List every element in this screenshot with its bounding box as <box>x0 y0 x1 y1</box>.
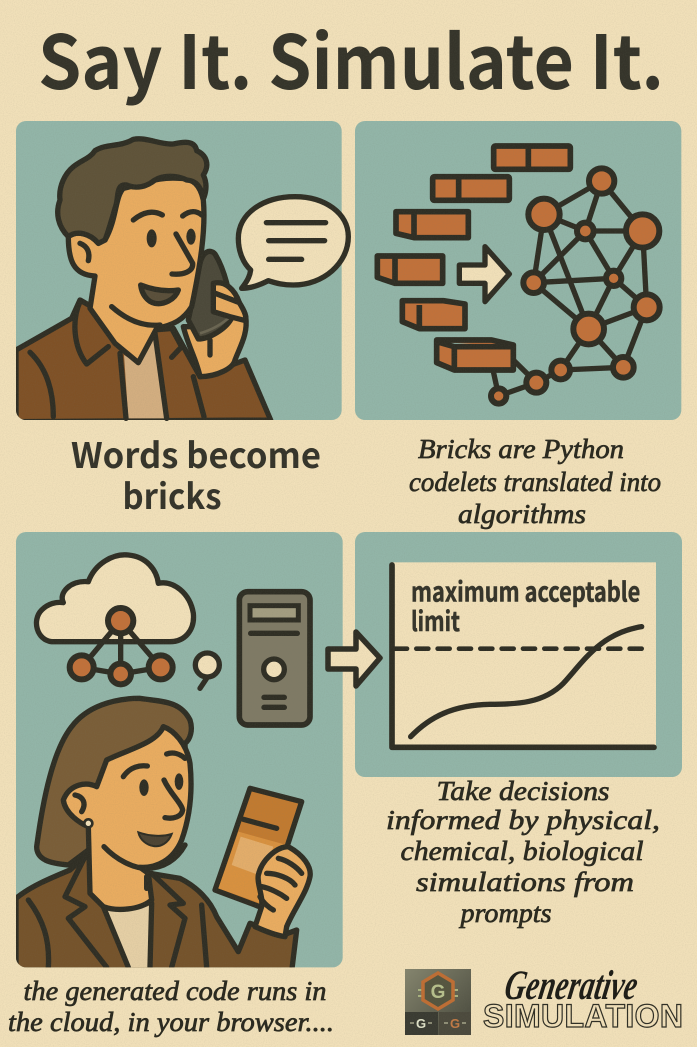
logo icon: G <box>416 1016 426 1031</box>
woman hand <box>255 847 310 937</box>
simulation curve <box>411 627 642 737</box>
title: Say It. Simulate It. <box>38 4 664 111</box>
held card <box>215 788 302 909</box>
woman facial features <box>75 753 185 868</box>
caption: bricks are python codelets: Bricks are Python <box>418 434 624 464</box>
panel: chart <box>355 532 682 777</box>
chart axes <box>392 565 654 747</box>
hair <box>58 139 207 243</box>
caption: take decisions: chemical, biological <box>400 836 644 866</box>
palm of hand <box>183 310 246 377</box>
caption: words become bricks: bricks <box>122 469 222 520</box>
jacket details <box>30 302 204 418</box>
limit dashed line <box>395 642 642 656</box>
network graph <box>491 168 660 404</box>
caption: take decisions: informed by physical, <box>386 805 660 835</box>
caption: bricks are python codelets <box>409 434 661 529</box>
cloud <box>36 555 194 642</box>
caption: bricks are python codelets: algorithms <box>458 499 586 529</box>
arrow <box>459 247 509 302</box>
speech bubble <box>238 197 348 288</box>
face and neck <box>68 178 204 363</box>
fingers <box>210 283 246 355</box>
woman shirt <box>108 906 150 968</box>
panel: bricks to network <box>355 121 681 420</box>
caption: bricks are python codelets: codelets translated into <box>409 467 661 497</box>
logo wordmark <box>483 962 683 1034</box>
logo wordmark: Generative <box>501 962 641 1009</box>
logo wordmark: SIMULATION <box>483 998 683 1034</box>
caption: generated code <box>8 976 334 1037</box>
bricks <box>377 146 570 370</box>
panel: man on phone <box>16 121 348 422</box>
arrow: to chart <box>328 632 380 686</box>
cloud network <box>70 608 173 684</box>
facial features <box>80 212 202 325</box>
panel: cloud, server and woman <box>16 532 343 972</box>
woman jacket <box>16 855 297 972</box>
chart label: maximum acceptable <box>411 571 640 610</box>
caption: words become bricks <box>71 428 321 520</box>
woman hair <box>37 698 191 865</box>
jacket <box>16 300 271 422</box>
caption: take decisions: Take decisions <box>436 776 610 806</box>
chart label <box>411 571 640 639</box>
caption: generated code: the generated code runs in <box>24 976 326 1006</box>
caption: take decisions: prompts <box>458 898 552 928</box>
shirt <box>124 333 167 418</box>
caption: take decisions: simulations from <box>416 867 634 897</box>
magnifier <box>195 653 219 688</box>
logo icon <box>405 969 471 1035</box>
chart background <box>392 562 656 747</box>
chart label: limit <box>411 600 460 639</box>
computer tower <box>239 592 310 725</box>
woman face and neck <box>63 727 191 909</box>
caption: generated code: the cloud, in your browser.... <box>8 1007 334 1037</box>
logo icon: G <box>431 982 445 1003</box>
logo icon: G <box>450 1016 460 1031</box>
caption: words become bricks: Words become <box>71 428 321 479</box>
woman jacket details <box>28 850 207 967</box>
phone <box>188 251 232 339</box>
caption: take decisions <box>386 776 660 928</box>
